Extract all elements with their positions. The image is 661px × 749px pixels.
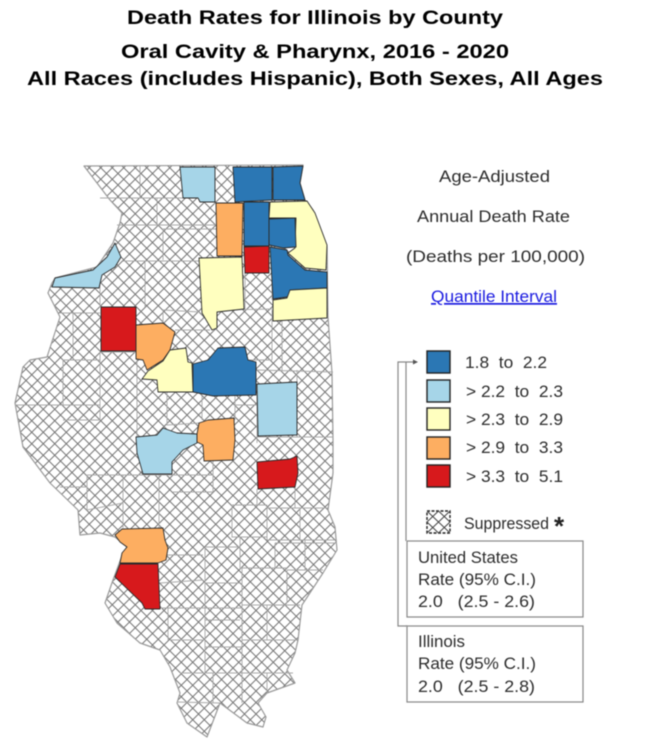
state outline with suppressed hatch [15,165,337,737]
county: light blue Sangamon [136,428,197,474]
connector lines with arrow [398,360,418,626]
county: light blue north [180,167,215,202]
quantile interval link: Quantile Interval [431,287,557,306]
United States rate box [407,541,583,617]
legend: 2.3 to 2.9 [427,408,563,430]
county: red west [101,307,136,351]
county: dark blue Kane [244,202,269,246]
legend: 1.8 to 2.2 [427,351,547,373]
Illinois rate box: 2.0 (2.5 - 2.8) [418,678,535,696]
county: dark blue McHenry [233,167,272,202]
county boundary lines [15,166,337,703]
legend [398,351,565,626]
county: red Kendall [244,246,269,273]
legend: 2.2 to 2.3 [427,380,563,402]
rate description text [406,167,585,306]
United States rate box: United States [418,549,518,567]
Illinois rate box: Illinois [418,633,465,651]
title: Death Rates for Illinois by County [127,7,503,29]
legend: suppressed: * [554,511,565,541]
rate description text: Age-Adjusted [439,167,550,186]
Illinois rate box [407,626,583,702]
choropleth map of Illinois counties [15,165,337,737]
legend: 2.9 to 3.3: > 2.9 to 3.3 [466,439,563,457]
United States rate box: Rate (95% C.I.) [418,571,536,589]
legend: 2.9 to 3.3 [427,437,563,459]
Illinois rate box: Rate (95% C.I.) [418,655,536,673]
legend: 2.2 to 2.3: > 2.2 to 2.3 [466,383,563,401]
rate description text: (Deaths per 100,000) [406,247,585,266]
title [27,7,603,90]
title: All Races (includes Hispanic), Both Sexes, All Ages [27,68,603,90]
legend: suppressed [427,511,565,541]
county: dark blue Will [270,247,327,299]
county: yellow Kankakee [273,288,327,321]
county: dark blue McLean [193,347,256,396]
county: yellow LaSalle [199,257,244,330]
county: red St. Clair [115,564,160,609]
county: light blue Vermilion [257,382,297,436]
county: yellow Cook [269,201,327,270]
legend: 1.8 to 2.2: 1.8 to 2.2 [465,354,547,372]
legend: 2.3 to 2.9: > 2.3 to 2.9 [466,411,563,429]
United States rate box: 2.0 (2.5 - 2.6) [418,593,535,611]
rate description text: Annual Death Rate [417,207,570,226]
legend: suppressed: Suppressed [464,515,549,533]
county: orange Macon [197,418,235,461]
legend: 3.3 to 5.1 [427,465,563,487]
title: Oral Cavity & Pharynx, 2016 - 2020 [121,41,509,63]
county: dark blue DuPage [269,218,296,248]
county: orange north [216,203,243,256]
county: orange Madison [115,528,168,563]
legend: 3.3 to 5.1: > 3.3 to 5.1 [466,468,563,486]
county: yellow Tazewell [142,348,193,392]
county: orange Peoria [136,323,175,370]
county: dark blue Lake [273,166,305,200]
county: light blue Rock Island [52,243,121,288]
county: red Coles [257,456,298,489]
